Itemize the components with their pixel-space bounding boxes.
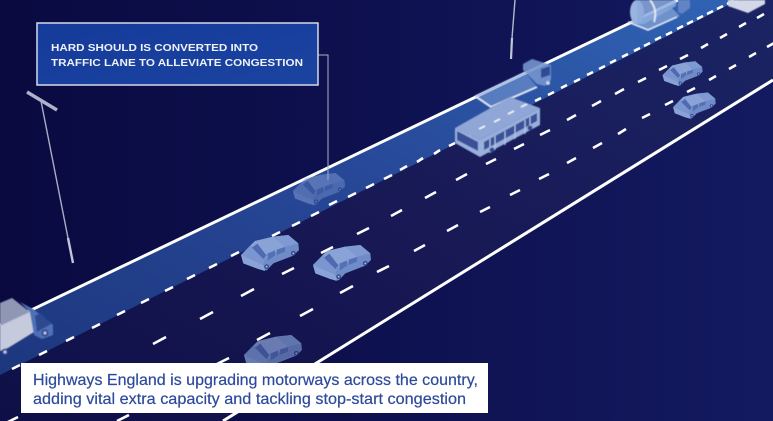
street lamp left: [27, 92, 73, 263]
white truck top right: [728, 0, 765, 13]
caption box: [21, 363, 488, 413]
callout text: TRAFFIC LANE TO ALLEVIATE CONGESTION: [51, 57, 303, 69]
callout text: HARD SHOULD IS CONVERTED INTO: [51, 42, 258, 54]
caption text: adding vital extra capacity and tackling stop-start congestion: [33, 391, 466, 408]
van on hard shoulder: [0, 298, 53, 355]
bus: [455, 97, 540, 157]
far car lower: [673, 92, 716, 119]
car translucent on hard shoulder: [293, 173, 345, 205]
car near the caption: [244, 335, 302, 371]
shoulder outer white edge line: [0, 0, 678, 325]
street lamp top: [511, 0, 515, 59]
car in lane one: [241, 235, 299, 271]
far car upper: [663, 61, 703, 86]
carriageway right white edge line: [223, 80, 773, 421]
flatbed truck on hard shoulder: [475, 59, 551, 107]
tanker truck: [628, 0, 690, 31]
caption text: Highways England is upgrading motorways across the country,: [33, 372, 478, 389]
dashed line: lane divider two: [117, 43, 773, 421]
callout box: hard shoulder: [37, 23, 318, 85]
car in lane two: [313, 245, 371, 281]
callout leader line: [318, 55, 328, 180]
